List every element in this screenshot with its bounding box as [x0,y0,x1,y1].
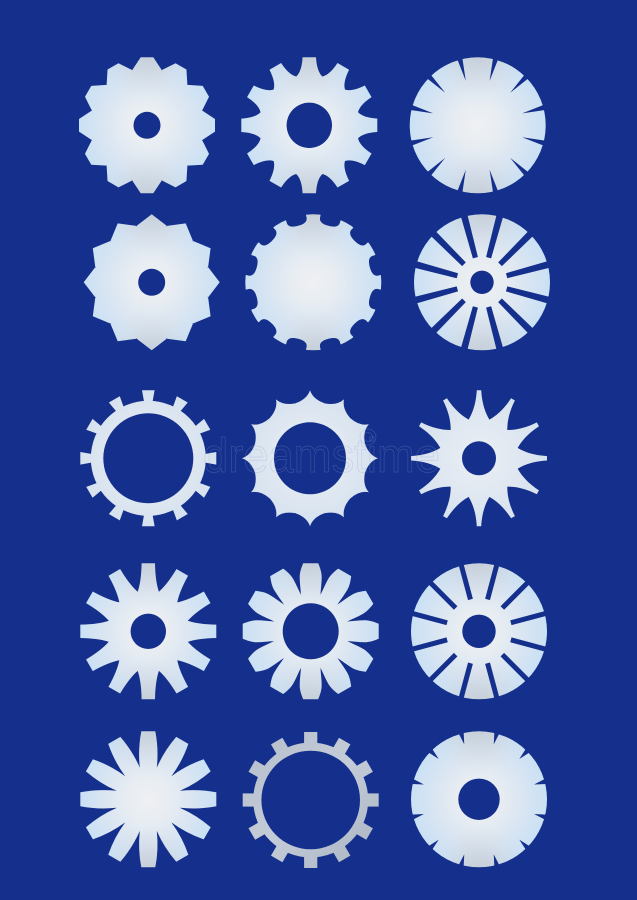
icon: gear 4, pointed star teeth [83,213,221,351]
watermark: text and spiral mark: dreamstime [203,430,440,483]
icon: gear 8, ring with concave spikes [241,389,379,527]
icon: gear 9, thin spiked sun [410,389,548,527]
icon: disc 15, small rim notches with hole [410,730,548,868]
icon: gear 2, separated teeth with medium hole [240,56,378,194]
icon: gear 13, solid daisy petals [79,730,217,868]
icon: gear 11, flower petals with hole [242,562,380,700]
icon: disc 3, thin rim slits [409,56,547,194]
icon: gear 7, thin ring with dovetail teeth [79,389,217,527]
icon: disc 6, long spoke slots [413,213,551,351]
icon: gear 1, blunt teeth with small hole [78,56,216,194]
icon: gear 10, long flat teeth [79,562,217,700]
infographic canvas: gear icon set [79,57,550,868]
icon: disc 12, short spoke slots [410,562,548,700]
icon: gear 5, round notched disc [244,213,382,351]
icon: gear 14, grey ring with square teeth [242,731,380,869]
